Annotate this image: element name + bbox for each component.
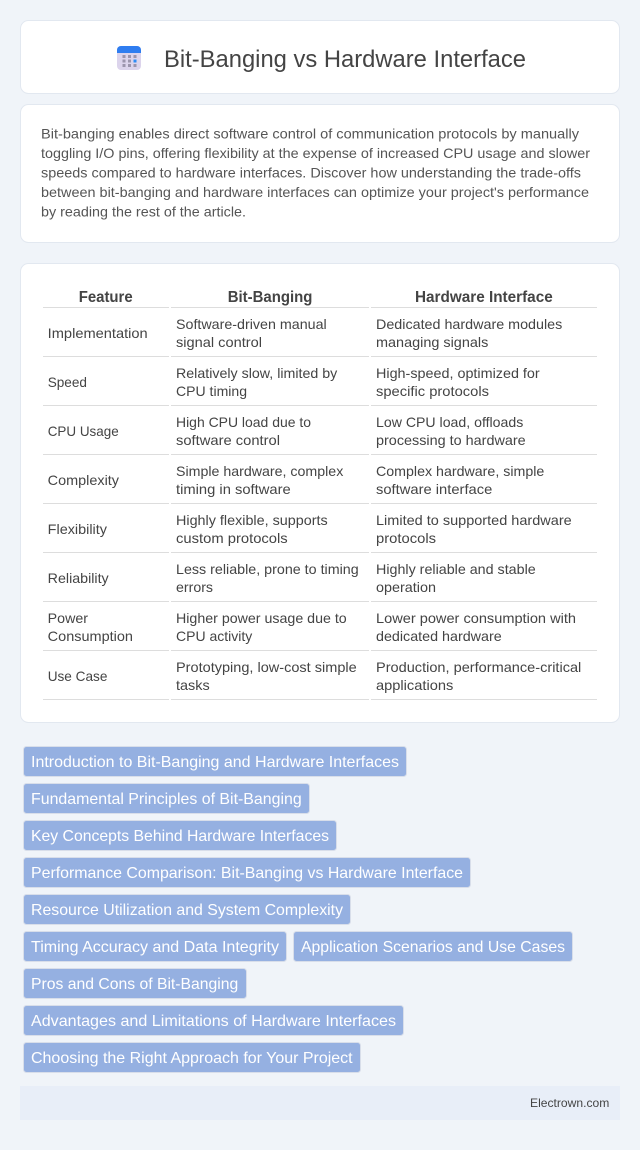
row: Implementation: signal control — [176, 334, 262, 350]
row: CPU Usage: processing to hardware — [376, 432, 526, 448]
row: Reliability: Highly reliable and stable — [376, 561, 536, 577]
tag: Introduction — [24, 746, 406, 776]
row: Flexibility: Limited to supported hardware — [376, 512, 572, 528]
table header row: Bit-Banging — [228, 289, 312, 306]
tag: Timing Accuracy — [24, 932, 286, 962]
tag: Application Scenarios: Application Scenarios and Use Cases — [301, 939, 565, 956]
tag: Pros and Cons: Pros and Cons of Bit-Banging — [31, 976, 238, 993]
row: Implementation — [43, 316, 597, 357]
row: Flexibility: Flexibility — [48, 521, 107, 537]
row: Speed — [43, 365, 597, 406]
table header row: Feature — [79, 289, 133, 306]
row: Flexibility: protocols — [376, 530, 436, 546]
intro text block: between bit-banging and hardware interfaces can optimize your project's performance — [41, 184, 589, 200]
tag: Choosing the Right Approach — [24, 1042, 360, 1072]
row: Complexity: Complexity — [48, 472, 119, 488]
tag: Advantages and Limitations: Advantages and Limitations of Hardware Interfaces — [31, 1013, 396, 1030]
tag: Fundamental Principles: Fundamental Principles of Bit-Banging — [31, 791, 302, 808]
row: Complexity: timing in software — [176, 481, 291, 497]
tag: Resource Utilization — [24, 894, 350, 924]
tag: Pros and Cons — [24, 968, 246, 998]
footer — [20, 1086, 620, 1120]
row: Complexity — [43, 463, 597, 504]
row: Use Case: tasks — [176, 677, 210, 693]
row: Implementation: managing signals — [376, 334, 488, 350]
tag: Introduction: Introduction to Bit-Banging and Hardware Interfaces — [31, 754, 399, 771]
tag: Timing Accuracy: Timing Accuracy and Data Integrity — [31, 939, 279, 956]
row: Use Case: Prototyping, low-cost simple — [176, 659, 357, 675]
panel: introduction — [20, 104, 620, 242]
row: Power Consumption: Lower power consumption with — [376, 610, 576, 626]
row: Power Consumption: Consumption — [48, 628, 133, 644]
row: CPU Usage — [43, 414, 597, 455]
intro text block: toggling I/O pins, offering flexibility at the expense of increased CPU usage and slower — [41, 145, 590, 161]
row: Reliability — [43, 561, 597, 602]
row: Complexity: Simple hardware, complex — [176, 463, 343, 479]
row: Speed: CPU timing — [176, 383, 247, 399]
tag: Choosing the Right Approach: Choosing the Right Approach for Your Project — [31, 1050, 353, 1067]
row: Flexibility — [43, 512, 597, 553]
row: Implementation: Software-driven manual — [176, 316, 327, 332]
row: Speed: Relatively slow, limited by — [176, 365, 337, 381]
row: Speed: specific protocols — [376, 383, 489, 399]
row: Speed: High-speed, optimized for — [376, 365, 540, 381]
row: Flexibility: custom protocols — [176, 530, 288, 546]
row: Complexity: software interface — [376, 481, 493, 497]
table header row: Hardware Interface — [415, 289, 553, 306]
row: Reliability: operation — [376, 579, 436, 595]
tag: Key Concepts — [24, 820, 336, 850]
row: Implementation: Dedicated hardware modules — [376, 316, 562, 332]
row: Flexibility: Highly flexible, supports — [176, 512, 328, 528]
row: Power Consumption — [43, 610, 597, 651]
row: Use Case: Production, performance-critical — [376, 659, 581, 675]
panel: comparison table — [20, 264, 620, 722]
tag: Performance Comparison — [24, 858, 470, 888]
row: Reliability: Reliability — [48, 570, 109, 586]
row: Power Consumption: dedicated hardware — [376, 628, 502, 644]
icon: calendar grid — [117, 46, 141, 70]
row: CPU Usage: CPU Usage — [48, 423, 119, 439]
panel: title header — [20, 20, 620, 94]
intro text block: Bit-banging enables direct software control of communication protocols by manually — [41, 126, 579, 142]
tag: Performance Comparison: Performance Comparison: Bit-Banging vs Hardware Interface — [31, 865, 463, 882]
tag: Resource Utilization: Resource Utilization and System Complexity — [31, 902, 343, 919]
table header row — [43, 289, 597, 308]
row: Power Consumption: CPU activity — [176, 628, 252, 644]
row: Use Case — [43, 659, 597, 700]
row: Speed: Speed — [48, 374, 87, 390]
section tags — [24, 746, 572, 1072]
intro text block — [41, 126, 590, 220]
row: Implementation: Implementation — [48, 325, 148, 341]
row: Complexity: Complex hardware, simple — [376, 463, 545, 479]
tag: Advantages and Limitations — [24, 1006, 404, 1036]
tag: Fundamental Principles — [24, 784, 310, 814]
row: Power Consumption: Power — [48, 610, 88, 626]
row: Use Case: Use Case — [48, 668, 108, 684]
tag: Application Scenarios — [294, 932, 572, 962]
row: CPU Usage: High CPU load due to — [176, 414, 311, 430]
row: Power Consumption: Higher power usage due to — [176, 610, 347, 626]
intro text block: speeds compared to hardware interfaces. Discover how understanding the trade-offs — [41, 164, 581, 180]
intro text block: by reading the rest of the article. — [41, 204, 246, 220]
row: Use Case: applications — [376, 677, 453, 693]
tag: Key Concepts: Key Concepts Behind Hardware Interfaces — [31, 828, 329, 845]
row: Reliability: Less reliable, prone to timing — [176, 561, 359, 577]
row: Reliability: errors — [176, 579, 213, 595]
row: CPU Usage: software control — [176, 432, 280, 448]
footer: Electrown.com — [530, 1096, 609, 1110]
row: CPU Usage: Low CPU load, offloads — [376, 414, 523, 430]
title: Bit-Banging vs Hardware Interface — [164, 46, 526, 73]
